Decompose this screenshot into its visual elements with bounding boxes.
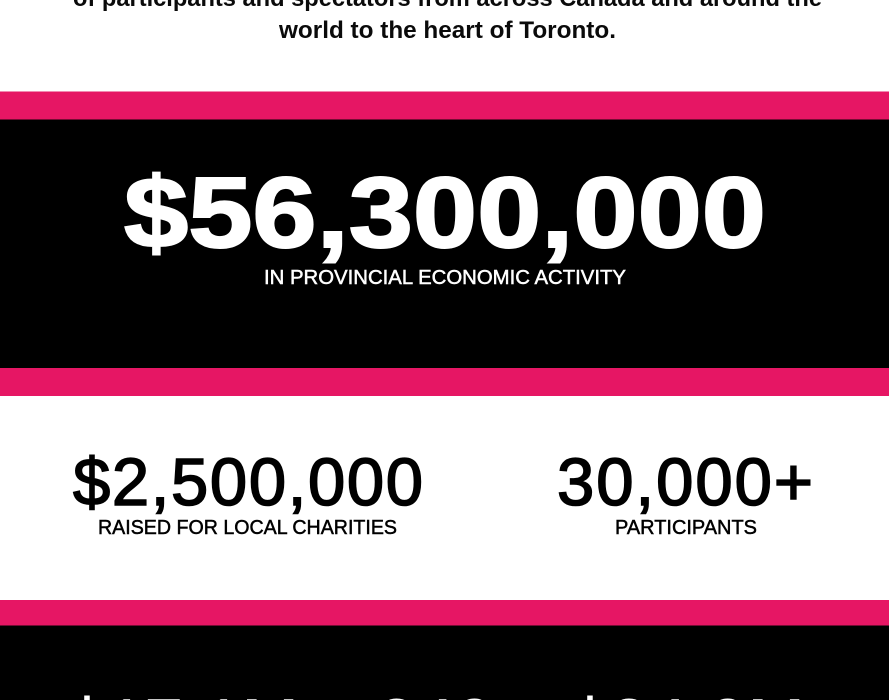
stat: funds raised: $2,500,000 (73, 445, 423, 520)
pink band: top (0, 92, 889, 120)
intro text (73, 0, 822, 44)
pink band: middle (0, 368, 889, 396)
cropped stat row (68, 686, 804, 700)
stat: participants: PARTICIPANTS (615, 516, 757, 539)
panel: charities and participants (73, 445, 813, 539)
headline stat: $56,300,000: $56,300,000 (124, 157, 766, 269)
stat: participants: 30,000+ (557, 445, 813, 520)
panel: lower statistics (0, 626, 889, 700)
stat: funds raised: RAISED FOR LOCAL CHARITIES (98, 516, 397, 539)
intro text: world to the heart of Toronto. (278, 17, 616, 44)
panel: provincial economic activity (0, 120, 889, 368)
stat label: provincial economic activity: IN PROVINCIAL ECONOMIC ACTIVITY (264, 266, 626, 289)
pink band: lower (0, 600, 889, 626)
